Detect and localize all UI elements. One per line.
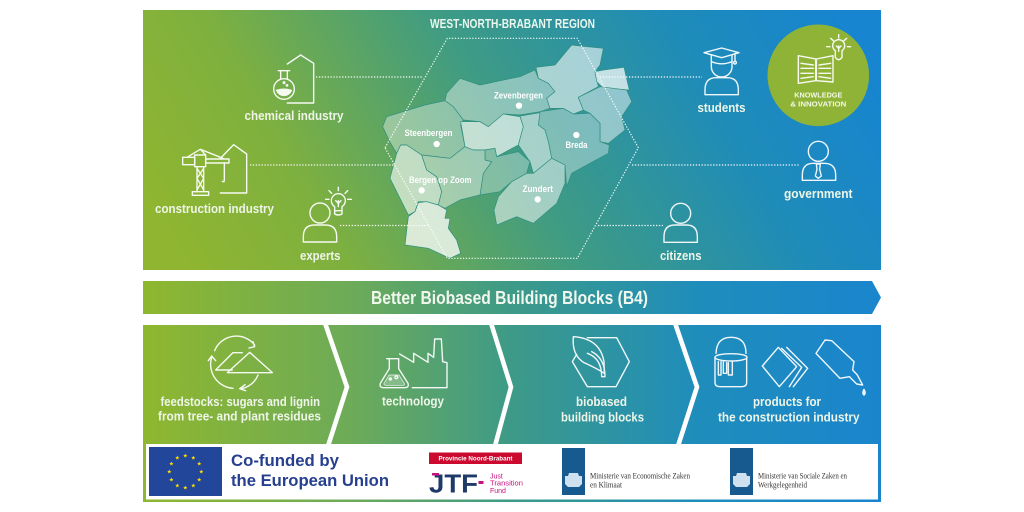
label: government: government <box>784 186 853 201</box>
icon: construction industry <box>183 145 247 195</box>
label: students: students <box>698 100 746 115</box>
label: experts: experts <box>300 248 340 263</box>
icon: feedstocks <box>208 336 272 391</box>
logo: Provincie Noord-Brabant: Provincie Noord-Brabant <box>438 456 513 462</box>
icon: board panels <box>762 347 808 387</box>
map of the region: Zundert <box>522 184 553 194</box>
icon: students <box>704 48 739 95</box>
icon: chemical industry <box>274 55 314 103</box>
heading: region title: WEST-NORTH-BRABANT REGION <box>430 17 595 31</box>
map of the region: Zevenbergen <box>494 90 543 100</box>
icon: book with light bulb <box>798 35 851 83</box>
icon: experts <box>303 187 351 242</box>
icon: paint can <box>715 337 747 387</box>
label: biobased building blocks: building blocks <box>561 410 644 424</box>
logo: Ministerie van Economische Zaken en Klimaat <box>562 448 691 495</box>
banner: Better Biobased Building Blocks: Better Biobased Building Blocks (B4) <box>371 288 648 308</box>
badge: knowledge and innovation <box>768 25 869 126</box>
icon: government <box>802 141 836 180</box>
label: technology: technology <box>382 394 445 408</box>
icon: citizens <box>664 203 697 242</box>
text: co-funded by the European Union <box>231 451 389 490</box>
label: feedstocks <box>158 394 321 424</box>
label: citizens: citizens <box>660 248 702 263</box>
logo: Just Transition Fund: Fund <box>490 488 506 495</box>
badge: knowledge and innovation: KNOWLEDGE <box>794 90 843 100</box>
text: co-funded by the European Union: the European Union <box>231 471 389 490</box>
logo: Ministerie van Sociale Zaken en Werkgelegenheid: Werkgelegenheid <box>758 480 808 490</box>
text: co-funded by the European Union: Co-funded by <box>231 451 340 470</box>
label: feedstocks: from tree- and plant residues <box>158 408 321 424</box>
logo: EU flag <box>149 447 222 496</box>
logo: Just Transition Fund <box>429 468 523 498</box>
label: construction industry: construction industry <box>155 201 275 216</box>
panel: value chain <box>143 323 881 502</box>
label: chemical industry: chemical industry <box>244 108 344 123</box>
label: feedstocks: feedstocks: sugars and lignin <box>160 394 320 409</box>
logo: Ministerie van Economische Zaken en Klimaat: Ministerie van Economische Zaken <box>590 470 691 480</box>
logo: Just Transition Fund: Just <box>490 474 503 480</box>
label: products for the construction industry <box>718 394 860 424</box>
badge: knowledge and innovation: & INNOVATION <box>790 100 846 108</box>
map of the region: Breda <box>566 140 588 150</box>
logo: Provincie Noord-Brabant <box>429 452 522 464</box>
icon: biobased hexagon leaf <box>572 337 629 387</box>
icon: technology <box>380 339 447 388</box>
map of the region: Steenbergen <box>404 128 452 138</box>
banner: Better Biobased Building Blocks <box>143 281 881 314</box>
map of the region <box>383 45 632 258</box>
logo: Just Transition Fund: Transition <box>490 480 523 488</box>
logo: Ministerie van Sociale Zaken en Werkgelegenheid <box>730 448 848 495</box>
label: biobased building blocks: biobased <box>576 394 627 409</box>
label: products for the construction industry: the construction industry <box>718 410 860 424</box>
label: products for the construction industry: products for <box>753 394 821 409</box>
logo: Ministerie van Economische Zaken en Klimaat: en Klimaat <box>590 480 623 490</box>
label: biobased building blocks <box>561 394 644 424</box>
panel: funding logos <box>146 444 878 500</box>
logo: Ministerie van Sociale Zaken en Werkgelegenheid: Ministerie van Sociale Zaken en <box>758 470 848 480</box>
icon: glue bottle <box>816 340 865 395</box>
panel: West-North-Brabant region <box>143 10 881 270</box>
map of the region: Bergen op Zoom <box>409 175 472 185</box>
logo: Just Transition Fund: JTF <box>429 468 478 498</box>
